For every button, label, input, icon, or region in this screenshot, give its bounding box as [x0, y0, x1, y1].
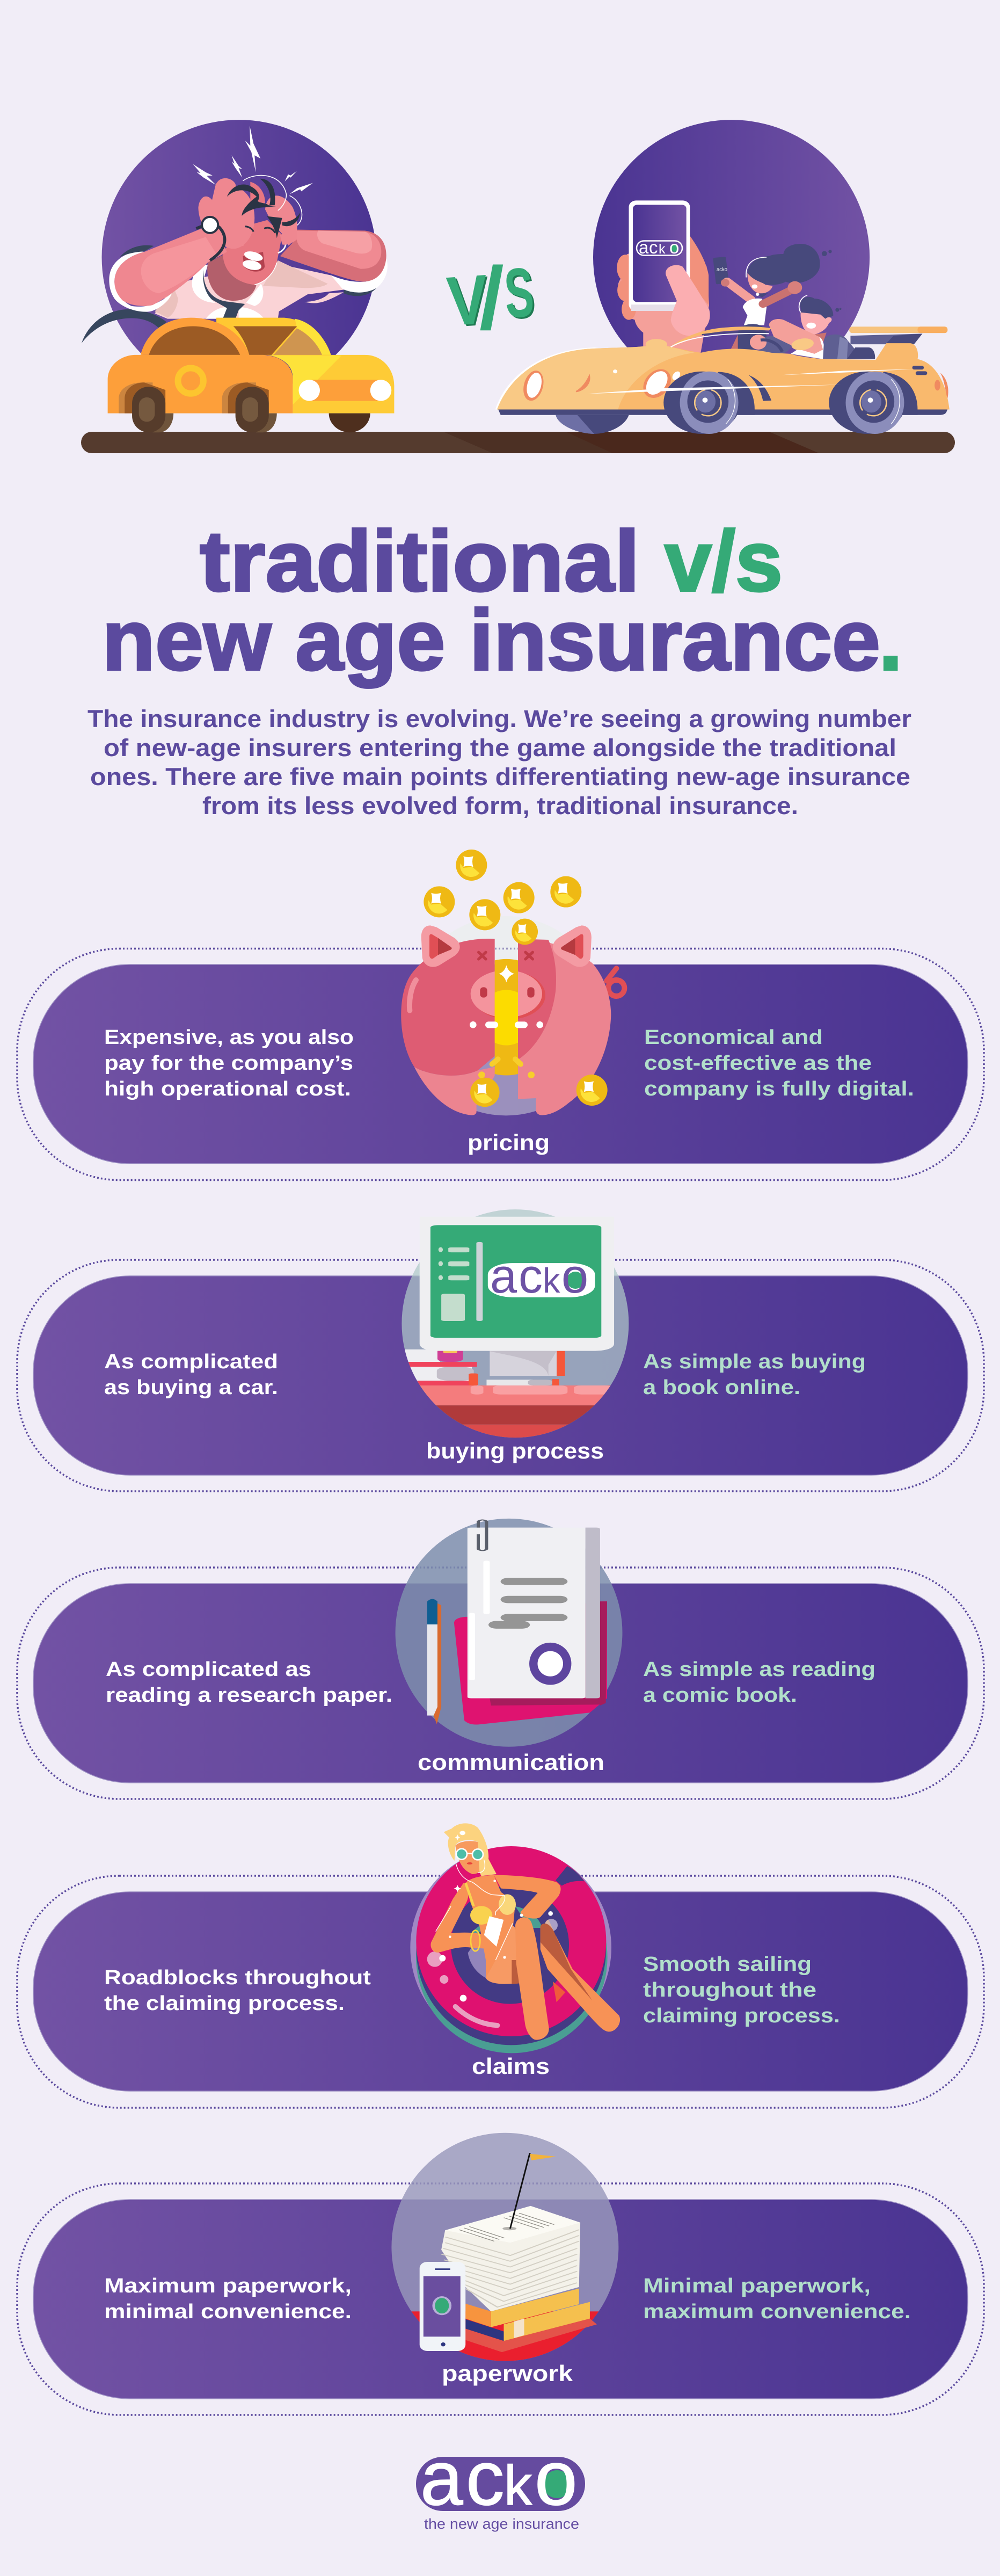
text: new age paperwork: maximum convenience.: [643, 2301, 911, 2323]
text: new age pricing: cost-effective as the: [644, 1052, 872, 1075]
intro paragraph: [87, 705, 911, 819]
icon: acko logo on monitor: k: [543, 1261, 560, 1300]
text: traditional communication: reading a research paper.: [106, 1684, 392, 1707]
title: [102, 513, 902, 688]
icon: acko logo on monitor: a: [490, 1250, 517, 1303]
footer logo: acko: a: [420, 2436, 463, 2521]
text: traditional claims: Roadblocks throughout: [104, 1967, 371, 1989]
pill background: [33, 1276, 968, 1475]
illustration: v/s lettering: [444, 249, 538, 347]
panel: claims: [17, 1823, 984, 2108]
text: new age pricing: [644, 1026, 914, 1100]
text: new age buying process: [643, 1351, 866, 1399]
icon: acko logo on monitor: o: [561, 1250, 588, 1303]
text: traditional buying process: [104, 1351, 278, 1399]
text: traditional pricing: [104, 1026, 354, 1100]
dotted outline: [17, 1568, 984, 1799]
icon: acko logo on monitor: [490, 1250, 588, 1303]
tagline: the new age insurance: [424, 2516, 579, 2532]
illustration: v/s lettering: S: [502, 252, 536, 333]
intro paragraph: The insurance industry is evolving. We’re seeing a growing number: [87, 705, 911, 732]
hero illustration: traditional vs new age: [81, 120, 955, 453]
text: new age claims: throughout the: [643, 1979, 816, 2001]
text: new age buying process: As simple as buying: [643, 1351, 866, 1373]
illustration: v/s lettering: /: [479, 249, 504, 347]
icon: document with paperclip and pen: [396, 1519, 622, 1747]
icon: acko wordmark on large phone: c: [649, 237, 658, 257]
text: new age pricing: company is fully digital.: [644, 1078, 914, 1100]
footer logo: acko: [416, 2436, 585, 2532]
icon: stack of paper, books and phone: [391, 2133, 618, 2362]
label: paperwork: paperwork: [442, 2361, 573, 2386]
footer logo: acko: k: [504, 2455, 532, 2517]
illustration: road: [81, 432, 955, 453]
dotted outline: [17, 2183, 984, 2415]
dotted outline: [17, 1876, 984, 2108]
panel: buying process: [17, 1209, 984, 1491]
title: traditional: [200, 513, 640, 609]
intro paragraph: from its less evolved form, traditional insurance.: [202, 792, 798, 819]
icon: piggy bank with coins: [401, 850, 624, 1115]
pill background: [33, 964, 968, 1164]
text: new age paperwork: Minimal paperwork,: [643, 2275, 871, 2297]
text: traditional paperwork: [104, 2275, 352, 2323]
text: traditional pricing: Expensive, as you also: [104, 1026, 354, 1049]
label: claims: claims: [472, 2053, 550, 2079]
illustration: happy couple in sports car with phone: [495, 120, 950, 434]
panel: communication: [17, 1519, 984, 1799]
text: traditional communication: As complicated as: [106, 1658, 311, 1681]
icon: woman relaxing on swim ring: [410, 1823, 620, 2053]
pill background: [33, 1584, 968, 1783]
text: traditional paperwork: Maximum paperwork,: [104, 2275, 352, 2297]
footer logo: acko: o: [535, 2436, 578, 2521]
text: traditional pricing: high operational cost.: [104, 1078, 351, 1100]
pill background: [33, 1892, 968, 2091]
illustration: v/s lettering: V: [444, 259, 491, 340]
text: traditional buying process: As complicated: [104, 1351, 278, 1373]
text: traditional communication: [106, 1658, 392, 1707]
text: new age communication: As simple as reading: [643, 1658, 875, 1681]
icon: acko wordmark on large phone: k: [659, 242, 666, 257]
text: new age claims: Smooth sailing: [643, 1953, 812, 1976]
text: new age pricing: Economical and: [644, 1026, 823, 1049]
title: .: [879, 592, 902, 688]
text: traditional paperwork: minimal convenience.: [104, 2301, 352, 2323]
icon: acko wordmark on large phone: [637, 237, 682, 257]
text: new age communication: [643, 1658, 875, 1707]
text: new age communication: a comic book.: [643, 1684, 797, 1707]
label: buying process: buying process: [426, 1438, 604, 1463]
text: traditional pricing: pay for the company’s: [104, 1052, 353, 1075]
text: traditional claims: the claiming process.: [104, 1992, 345, 2015]
panel: paperwork: [17, 2133, 984, 2415]
pill background: [33, 2200, 968, 2399]
text: traditional claims: [104, 1967, 371, 2015]
label: communication: communication: [418, 1750, 604, 1775]
text: new age claims: [643, 1953, 840, 2027]
footer logo: acko: c: [466, 2436, 505, 2521]
illustration: v/s lettering: S: [503, 254, 538, 334]
title: new age insurance: [102, 592, 880, 688]
intro paragraph: of new-age insurers entering the game alongside the traditional: [104, 734, 896, 761]
text: new age claims: claiming process.: [643, 2005, 840, 2027]
dotted outline: [17, 1260, 984, 1491]
intro paragraph: ones. There are five main points differentiating new-age insurance: [90, 763, 910, 790]
panel: pricing: [17, 850, 984, 1180]
text: new age paperwork: [643, 2275, 911, 2323]
icon: acko logo on monitor: c: [519, 1250, 543, 1303]
label: pricing: pricing: [468, 1130, 550, 1155]
icon: acko wordmark on large phone: o: [669, 237, 679, 257]
illustration: v/s lettering: V: [446, 261, 492, 342]
icon: computer monitor with acko site: [402, 1209, 629, 1440]
icon: acko wordmark on large phone: a: [639, 237, 649, 257]
dotted outline: [17, 948, 984, 1180]
illustration: stressed man in old car: [82, 120, 394, 432]
text: new age buying process: a book online.: [643, 1376, 800, 1399]
title: v/s: [665, 513, 783, 609]
text: traditional buying process: as buying a car.: [104, 1376, 278, 1399]
icon: acko wordmark on small phone: acko: [717, 267, 727, 273]
